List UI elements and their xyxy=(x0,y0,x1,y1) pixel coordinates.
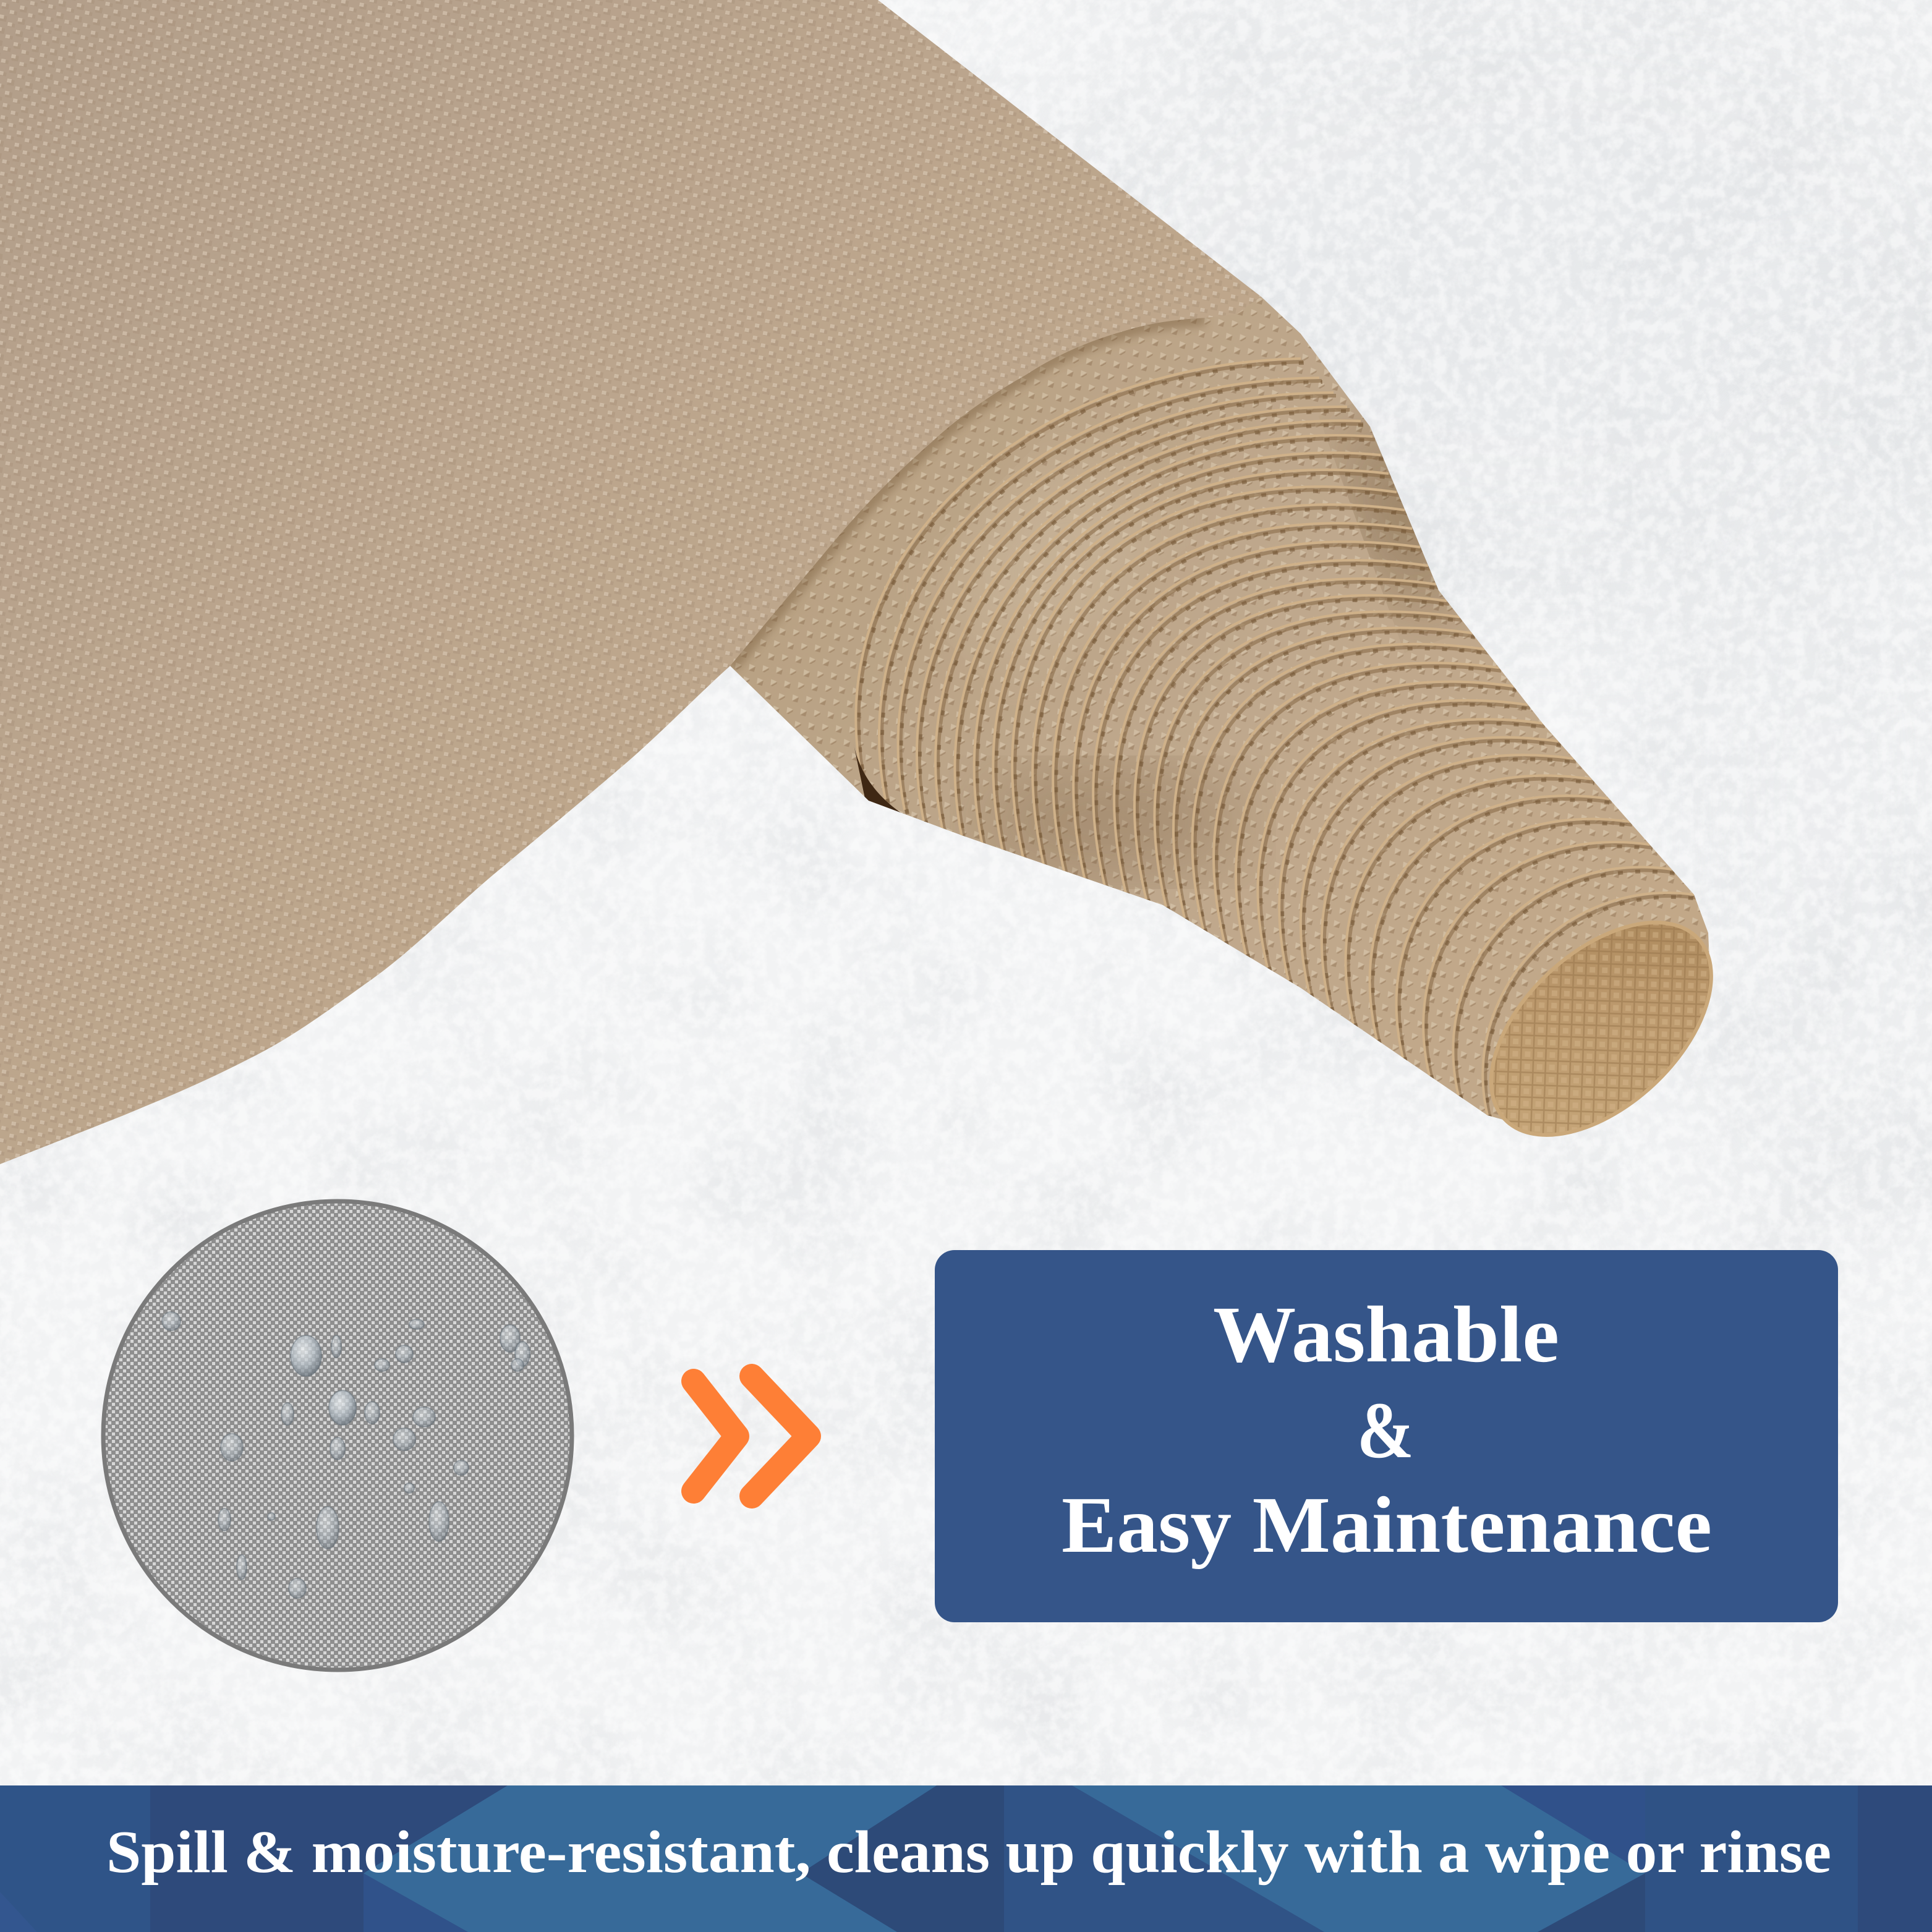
banner text: Spill & moisture-resistant, cleans up quickly with a wipe or rinse xyxy=(106,1819,1831,1886)
icon: orange double chevron arrow xyxy=(694,1376,809,1496)
dark cavity under the roll xyxy=(854,747,901,812)
banner hexagon left xyxy=(364,1785,937,1932)
panel: Washable & Easy Maintenance xyxy=(935,1250,1838,1622)
mouth of the roll xyxy=(1452,882,1750,1175)
heading: Easy Maintenance: Easy Maintenance xyxy=(1062,1481,1712,1570)
shadow below the flat sheet xyxy=(730,318,1206,666)
heading: ampersand: & xyxy=(1357,1386,1414,1475)
large flat mat sheet xyxy=(0,0,1261,1164)
banner hexagon right xyxy=(1072,1785,1645,1932)
water droplet fabric swatch xyxy=(103,1201,572,1670)
rolled mat cone with spiral layers xyxy=(730,278,1750,1175)
droplets xyxy=(162,1312,530,1598)
heading: Washable: Washable xyxy=(1213,1290,1559,1379)
bottom banner xyxy=(0,1785,1932,1932)
